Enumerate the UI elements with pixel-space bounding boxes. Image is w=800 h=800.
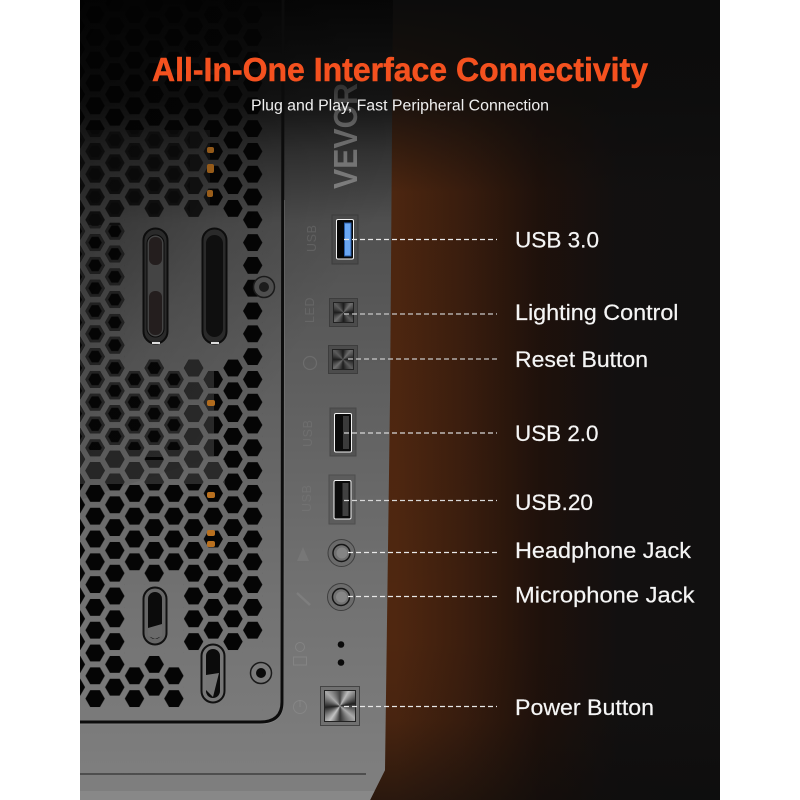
backdrop: orange glow <box>360 0 720 800</box>
silkscreen labels and icons: USB <box>305 224 319 252</box>
oval slot 2 <box>202 228 226 344</box>
silkscreen labels and icons <box>294 224 319 714</box>
honeycomb mesh <box>80 0 263 735</box>
button: lighting control <box>329 298 358 327</box>
shading over the left of the panel <box>80 0 393 500</box>
logo: VEVOR: VEVOR <box>327 83 364 189</box>
callout: Microphone Jack: Microphone Jack <box>515 583 695 608</box>
port: USB.20 <box>329 475 355 524</box>
port: headphone jack <box>328 540 355 566</box>
callout: Reset Button: Reset Button <box>515 347 648 372</box>
solid plate areas of the mesh <box>80 208 263 735</box>
lower bezel band <box>80 770 385 800</box>
callout: USB.20: USB.20 <box>515 490 593 515</box>
screw upper <box>254 276 274 298</box>
silkscreen labels and icons: USB <box>300 484 314 512</box>
button: power <box>320 686 360 726</box>
port: microphone jack <box>328 584 354 610</box>
oval slot 4 <box>202 644 224 702</box>
subtitle: Plug and Play, Fast Peripheral Connection <box>251 98 549 114</box>
indicator lights <box>338 641 344 666</box>
port: USB 2.0 <box>330 408 356 456</box>
callout: USB 2.0: USB 2.0 <box>515 421 598 446</box>
icon: orange glints behind mesh <box>207 147 215 547</box>
oval slot 1 <box>144 228 168 344</box>
callout: USB 3.0: USB 3.0 <box>515 228 599 253</box>
silkscreen labels and icons: LED <box>303 297 317 323</box>
oval slot 3 <box>144 588 166 644</box>
case front panel <box>80 0 393 800</box>
title: All-In-One Interface Connectivity <box>152 51 649 88</box>
callout: Lighting Control: Lighting Control <box>515 300 678 325</box>
panel recess outline <box>80 0 284 724</box>
silkscreen labels and icons: USB <box>301 419 315 447</box>
button: reset <box>328 345 358 374</box>
callout: Power Button: Power Button <box>515 695 654 720</box>
port: USB 3.0 <box>332 215 358 264</box>
screw lower <box>250 662 272 684</box>
callout: Headphone Jack: Headphone Jack <box>515 538 692 563</box>
